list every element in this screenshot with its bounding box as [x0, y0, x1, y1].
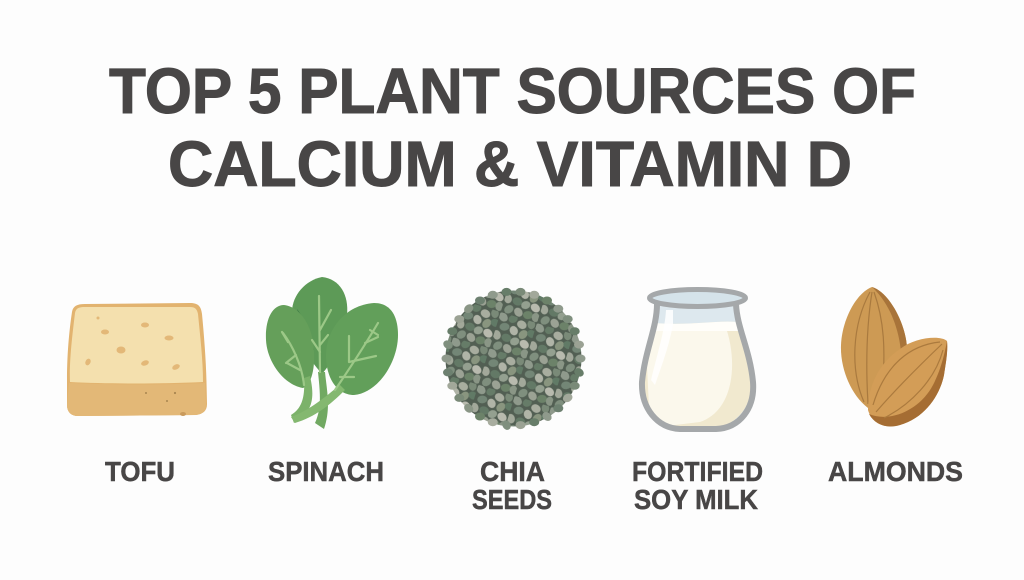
- icon: glass jar of milk: [640, 290, 756, 432]
- label: chia seeds: CHIA: [480, 456, 545, 487]
- back almond: [841, 287, 907, 408]
- item: fortified soy milk: [632, 290, 763, 515]
- item: tofu: [67, 303, 207, 487]
- title: [109, 55, 916, 200]
- label: almonds: ALMONDS: [828, 456, 963, 487]
- title: CALCIUM & VITAMIN D: [168, 128, 852, 200]
- label: chia seeds: SEEDS: [472, 484, 552, 515]
- title: TOP 5 PLANT SOURCES OF: [109, 55, 916, 127]
- icon: chia seed mound: [440, 285, 590, 435]
- front almond: [868, 338, 947, 426]
- item: spinach: [266, 277, 398, 487]
- label: fortified soy milk: FORTIFIED: [632, 456, 763, 487]
- label: tofu: TOFU: [105, 456, 175, 487]
- item: almonds: [828, 287, 963, 487]
- icon: tofu block: [67, 303, 207, 416]
- shadow in center leaf: [297, 309, 314, 350]
- right leaf: [326, 303, 398, 395]
- label: spinach: SPINACH: [268, 456, 384, 487]
- center leaf: [292, 277, 347, 374]
- label: chia seeds: [472, 456, 552, 515]
- label: fortified soy milk: [632, 456, 763, 515]
- left leaf: [266, 305, 314, 388]
- stems: [291, 376, 312, 423]
- icon: almonds: [841, 287, 947, 427]
- item: chia seeds: [440, 285, 590, 515]
- icon: spinach leaves: [266, 277, 398, 429]
- label: fortified soy milk: SOY MILK: [634, 484, 758, 515]
